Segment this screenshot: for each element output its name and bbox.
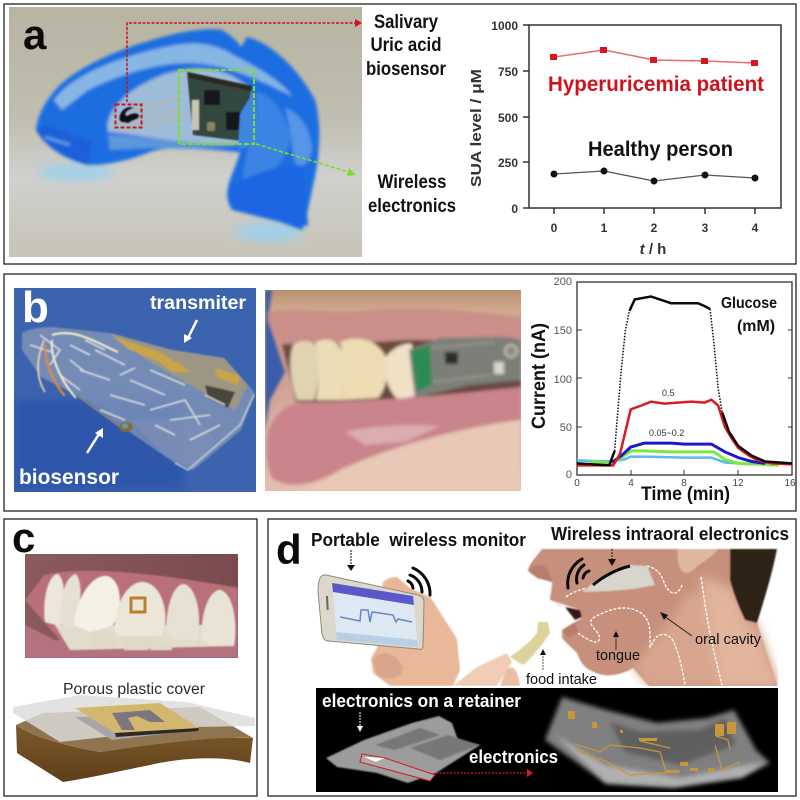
arrow: electronics zoom-in xyxy=(436,769,533,777)
food xyxy=(510,622,550,665)
line chart: SUA level over time xyxy=(468,19,781,258)
label: tongue: tongue xyxy=(596,647,640,664)
arrow: retainer pointer xyxy=(357,712,363,732)
line chart: current vs time for glucose: 100 xyxy=(554,374,572,386)
pcb xyxy=(119,72,258,150)
label: wireless electronics xyxy=(368,172,456,217)
label: hyperuricemia patient: Hyperuricemia patient xyxy=(548,73,764,96)
label: glucose (mM): (mM) xyxy=(737,318,775,335)
label: wireless intraoral electronics: Wireless intraoral electronics xyxy=(551,524,789,544)
line chart: current vs time for glucose: 4 xyxy=(628,478,634,489)
label: wireless electronics: Wireless xyxy=(378,172,446,193)
photo: retainer worn in mouth xyxy=(265,290,521,491)
line chart: current vs time for glucose: 50 xyxy=(560,422,572,434)
label: portable wireless monitor: Portable wireless monitor xyxy=(311,530,526,550)
line chart: current vs time for glucose: 0 xyxy=(574,478,580,489)
line chart: current vs time for glucose: 12 xyxy=(732,478,744,489)
label: b: b xyxy=(22,283,49,332)
label: salivary uric acid biosensor: Uric acid xyxy=(370,35,442,56)
label: electronics on a retainer: electronics on a retainer xyxy=(322,691,521,711)
retainer close-up xyxy=(326,716,480,783)
arrow: monitor pointer xyxy=(347,550,355,571)
label: wireless electronics: electronics xyxy=(368,196,456,217)
line chart: SUA level over time: 2 xyxy=(651,221,658,235)
flexible electronics close-up xyxy=(545,697,770,787)
label: glucose (mM): Glucose xyxy=(721,295,777,312)
curves: glucose responses xyxy=(577,296,792,465)
line chart: SUA level over time: 3 xyxy=(702,221,709,235)
panel c: tooth sensor xyxy=(4,514,257,796)
panel d: wireless intraoral electronics xyxy=(268,519,796,796)
panel a: salivary uric acid mouthguard xyxy=(4,4,796,264)
arrow: to biosensor xyxy=(87,428,103,453)
label: transmiter: transmiter xyxy=(150,293,247,314)
line chart: SUA level over time: 500 xyxy=(498,111,518,125)
feeding hand xyxy=(453,653,520,686)
phone hand xyxy=(371,577,460,686)
label: salivary uric acid biosensor xyxy=(366,12,447,80)
icon: wireless waves from cheek xyxy=(568,559,589,588)
line chart: SUA level over time: SUA level / μM xyxy=(468,69,485,187)
label: salivary uric acid biosensor: Salivary xyxy=(374,12,438,33)
arrow: intraoral electronics pointer xyxy=(608,549,616,566)
line chart: SUA level over time: 750 xyxy=(498,65,518,79)
arrow: food intake pointer xyxy=(540,649,546,670)
series: hyperuricemia patient xyxy=(550,47,758,66)
line chart: current vs time for glucose: 16 xyxy=(784,478,796,489)
arrow: tongue pointer xyxy=(613,631,619,650)
label: 0.05~0.2: 0.05~0.2 xyxy=(649,428,684,438)
line chart: current vs time for glucose: 200 xyxy=(554,276,572,288)
photo: retainer electronics on black xyxy=(316,688,778,792)
label: c: c xyxy=(12,514,35,561)
hair xyxy=(730,549,777,623)
label: electronics: electronics xyxy=(469,747,558,767)
panel b: glucose retainer sensor xyxy=(4,274,796,511)
green dashed callout arrow to electronics label xyxy=(179,70,356,176)
icon: wireless waves from phone xyxy=(408,568,430,595)
axis title: current (nA): Current (nA) xyxy=(529,323,550,429)
label: d: d xyxy=(276,526,302,573)
label: porous plastic cover: Porous plastic cover xyxy=(63,681,206,698)
dashed outlines xyxy=(566,566,722,685)
ear xyxy=(678,549,718,573)
retainer on cheek xyxy=(582,565,655,592)
face xyxy=(528,549,778,687)
label: 0.5: 0.5 xyxy=(662,388,675,398)
phone xyxy=(318,575,424,649)
label: salivary uric acid biosensor: biosensor xyxy=(366,59,447,80)
series: healthy person xyxy=(550,168,758,184)
arrow: oral cavity pointer xyxy=(660,612,692,636)
label: biosensor: biosensor xyxy=(19,466,119,489)
label: food intake: food intake xyxy=(526,671,597,688)
photo: user with phone and face xyxy=(316,548,778,687)
label: a: a xyxy=(23,11,47,58)
photo: transparent retainer on blue background xyxy=(14,288,256,492)
line chart: current vs time for glucose: 8 xyxy=(681,478,687,489)
electronics strip on cheek xyxy=(593,566,630,585)
line chart: SUA level over time: 1000 xyxy=(491,19,518,33)
arrow: to transmitter xyxy=(184,320,197,343)
photo: blue mouthguard with electronics xyxy=(9,7,362,257)
line chart: SUA level over time: 1 xyxy=(601,221,608,235)
illustration: layered sensor on tooth enamel xyxy=(13,695,255,782)
axis title: time (min): Time (min) xyxy=(641,484,730,505)
label: healthy person: Healthy person xyxy=(588,138,733,161)
line chart: SUA level over time: t / h xyxy=(640,241,666,258)
line chart: current vs time for glucose xyxy=(529,276,796,505)
line chart: current vs time for glucose: 150 xyxy=(554,325,572,337)
line chart: SUA level over time: 4 xyxy=(752,221,759,235)
line chart: SUA level over time: 0 xyxy=(511,202,518,216)
label: oral cavity: oral cavity xyxy=(695,631,761,648)
label: glucose (mM) xyxy=(721,295,777,335)
line chart: current vs time for glucose: 0 xyxy=(566,469,572,481)
line chart: SUA level over time: 250 xyxy=(498,156,518,170)
photo: sensor on tooth xyxy=(25,554,238,658)
line chart: SUA level over time: 0 xyxy=(551,221,558,235)
red dashed callout arrow to biosensor label xyxy=(116,19,362,128)
